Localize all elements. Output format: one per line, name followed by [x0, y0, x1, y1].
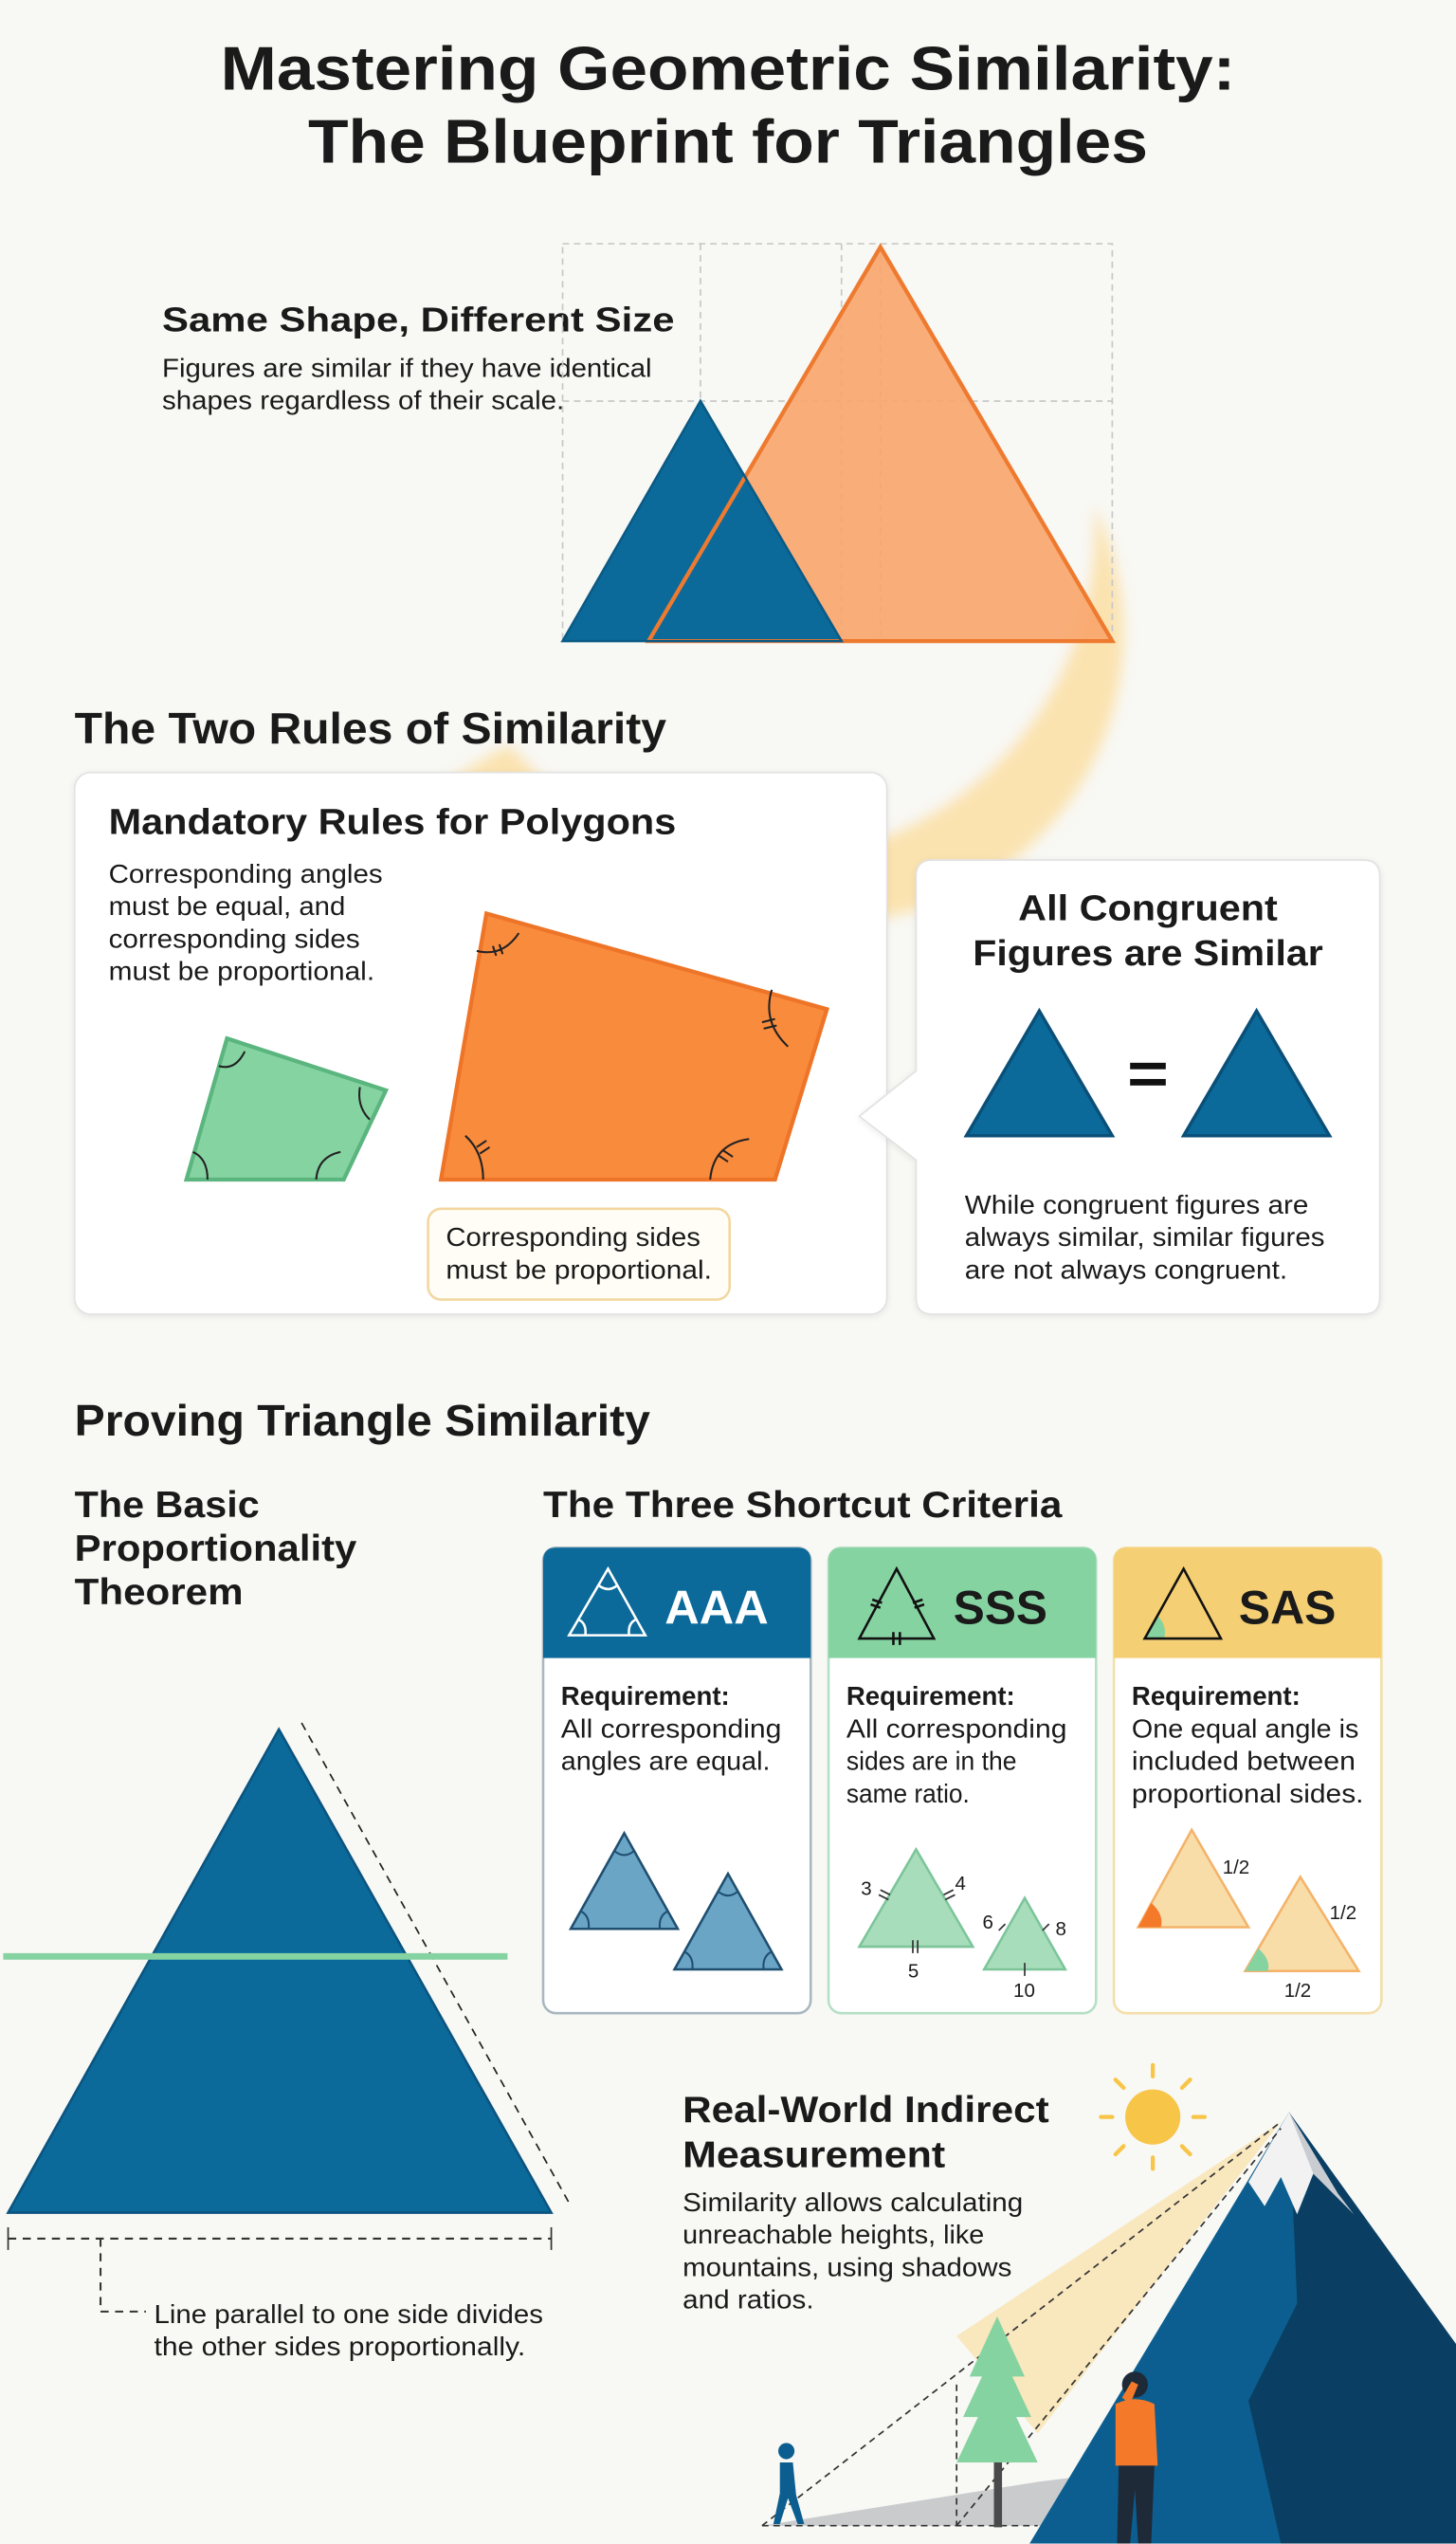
icon: tree: [956, 2316, 1038, 2527]
card: SSS: 8: [1056, 1918, 1066, 1940]
card: SSS: same ratio.: [846, 1779, 970, 1808]
card: SSS: Requirement:: [846, 1681, 1015, 1711]
card: SAS: included between: [1132, 1747, 1356, 1776]
callout: corresponding sides: [428, 1209, 730, 1300]
text: real-world indirect measurement: mountains, using shadows: [682, 2252, 1011, 2281]
card: AAA: Requirement:: [561, 1681, 730, 1711]
heading: proving triangle similarity: Proving Triangle Similarity: [75, 1396, 650, 1445]
card: AAA: All corresponding: [561, 1713, 781, 1743]
callout: corresponding sides: must be proportional.: [446, 1254, 712, 1284]
text: same shape different size: Figures are similar if they have identical: [162, 353, 652, 382]
card: AAA: AAA: [664, 1582, 769, 1635]
heading: two rules: The Two Rules of Similarity: [75, 704, 666, 753]
text: real-world indirect measurement: Measurement: [682, 2134, 945, 2176]
heading: basic proportionality theorem: [75, 1484, 356, 1613]
card: SSS: 10: [1013, 1980, 1035, 2002]
panel: congruent figures: always similar, similar figures: [965, 1222, 1324, 1252]
text: theorem caption: Line parallel to one side divides: [154, 2299, 543, 2329]
panel: congruent figures: Figures are Similar: [973, 933, 1323, 973]
card: SSS: 5: [908, 1961, 919, 1983]
card: SAS: [1114, 1547, 1381, 2013]
panel: congruent figures: While congruent figures are: [965, 1190, 1308, 1219]
text: real-world indirect measurement: unreachable heights, like: [682, 2220, 984, 2249]
text: same shape different size: Same Shape, Different Size: [162, 300, 675, 339]
text: theorem caption: the other sides proportionally.: [154, 2332, 525, 2361]
card: AAA: angles are equal.: [561, 1747, 770, 1776]
card: SSS: SSS: [954, 1582, 1047, 1635]
diagram: basic proportionality triangle: [3, 1723, 569, 2312]
callout: corresponding sides: Corresponding sides: [446, 1222, 701, 1252]
card: SSS: 4: [955, 1873, 966, 1894]
text: real-world indirect measurement: Similarity allows calculating: [682, 2187, 1023, 2217]
panel: mandatory rules for polygons: [75, 773, 887, 1314]
heading: basic proportionality theorem: The Basic: [75, 1484, 260, 1526]
panel: mandatory rules for polygons: Mandatory Rules for Polygons: [109, 802, 676, 842]
card: SSS: sides are in the: [846, 1747, 1016, 1776]
decorative yellow swoosh: [406, 195, 1123, 922]
text: theorem caption: [154, 2299, 543, 2361]
text: real-world indirect measurement: [682, 2089, 1049, 2314]
panel: mandatory rules for polygons: must be equal, and: [109, 891, 345, 921]
title: The Blueprint for Triangles: [308, 107, 1148, 176]
card: SAS: 1/2: [1330, 1902, 1356, 1924]
card: SAS: Requirement:: [1132, 1681, 1301, 1711]
shape: green quadrilateral: [187, 1038, 386, 1180]
text: same shape different size: shapes regardless of their scale.: [162, 386, 564, 415]
card: SAS: 1/2: [1284, 1980, 1311, 2002]
panel: mandatory rules for polygons: corresponding sides: [109, 924, 360, 953]
title: Mastering Geometric Similarity:: [221, 34, 1235, 103]
card: SAS: SAS: [1239, 1582, 1336, 1635]
illustration: mountain measurement scene: [762, 2113, 1456, 2544]
card: SSS: 3: [861, 1877, 872, 1899]
icon: observer person: [1116, 2371, 1157, 2544]
text: real-world indirect measurement: and ratios.: [682, 2284, 814, 2314]
card: SAS: proportional sides.: [1132, 1779, 1364, 1808]
card: SAS: One equal angle is: [1132, 1713, 1358, 1743]
card: SSS: 6: [983, 1912, 993, 1933]
panel: congruent figures: are not always congruent.: [965, 1254, 1287, 1284]
panel: mandatory rules for polygons: must be proportional.: [109, 957, 374, 986]
heading: basic proportionality theorem: Theorem: [75, 1571, 244, 1613]
card: SAS: 1/2: [1223, 1857, 1249, 1878]
heading: basic proportionality theorem: Proportionality: [75, 1528, 356, 1569]
icon: small person: [774, 2443, 804, 2524]
card: AAA: [543, 1547, 810, 2013]
panel: mandatory rules for polygons: Corresponding angles: [109, 859, 383, 888]
diagram: similar triangles on grid: [563, 244, 1112, 641]
icon: sun: [1101, 2065, 1205, 2169]
title: [221, 34, 1235, 176]
icon: equal triangles: [966, 1011, 1330, 1136]
card: SSS: [828, 1547, 1096, 2013]
text: real-world indirect measurement: Real-World Indirect: [682, 2089, 1049, 2131]
text: same shape different size: [162, 300, 675, 415]
heading: three shortcut criteria: The Three Shortcut Criteria: [543, 1484, 1064, 1526]
panel: congruent figures: All Congruent: [1018, 888, 1278, 927]
card: SSS: All corresponding: [846, 1713, 1066, 1743]
shape: orange quadrilateral: [441, 913, 827, 1180]
panel: congruent figures: [860, 860, 1380, 1314]
